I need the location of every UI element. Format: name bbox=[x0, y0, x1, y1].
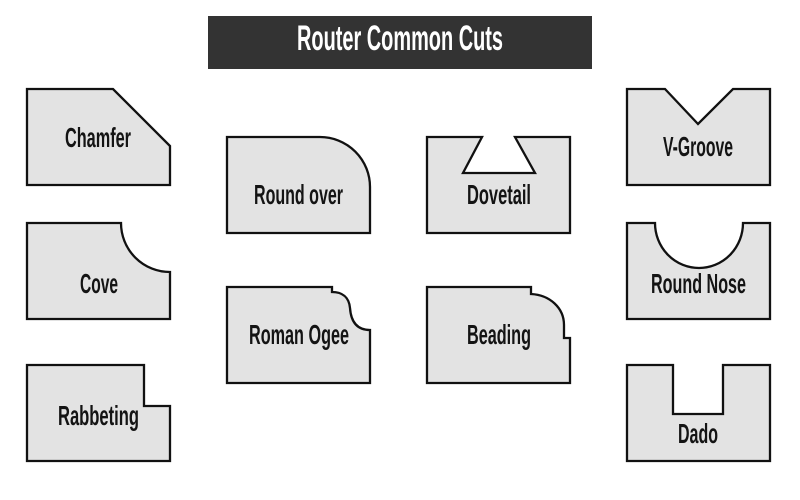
panel: Chamfer: Chamfer bbox=[65, 122, 131, 153]
title banner bbox=[208, 16, 592, 69]
panel: Beading bbox=[427, 287, 570, 383]
panel: Chamfer bbox=[27, 89, 170, 185]
panel: V-Groove bbox=[627, 89, 770, 185]
panel: Round over: Round over bbox=[254, 179, 343, 210]
panel: Roman Ogee: Roman Ogee bbox=[249, 319, 349, 350]
panel: Dado bbox=[627, 365, 770, 461]
panel: Dovetail: Dovetail bbox=[467, 179, 531, 210]
panel: Rabbeting bbox=[27, 365, 170, 461]
panel: Dado: Dado bbox=[678, 418, 718, 449]
panel: Rabbeting: Rabbeting bbox=[58, 400, 139, 431]
panel: Cove bbox=[27, 223, 170, 319]
panel: Round over bbox=[227, 137, 370, 233]
title banner: Router Common Cuts bbox=[297, 19, 503, 58]
panel: Round Nose bbox=[627, 223, 770, 319]
panel: V-Groove: V-Groove bbox=[663, 131, 733, 162]
panel: Cove: Cove bbox=[80, 268, 118, 299]
panel: Roman Ogee bbox=[227, 287, 370, 383]
panel: Beading: Beading bbox=[467, 319, 531, 350]
panel: Dovetail bbox=[427, 137, 570, 233]
